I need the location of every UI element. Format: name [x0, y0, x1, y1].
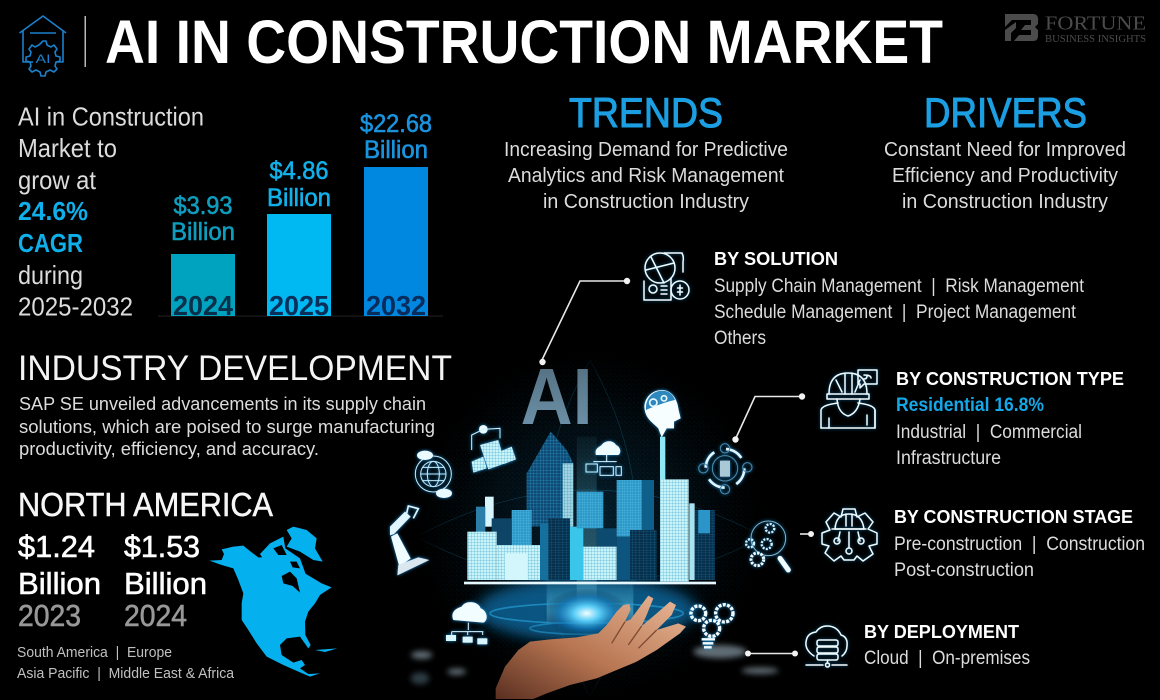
bar 2025 — [267, 157, 331, 321]
icon: cloud network — [446, 602, 487, 644]
bar 2032: Billion — [364, 136, 428, 164]
city platform — [464, 582, 716, 584]
bar 2025: Billion — [267, 184, 331, 212]
header divider — [85, 16, 86, 67]
growth statement: Market to — [18, 133, 117, 163]
title: AI IN CONSTRUCTION MARKET — [105, 8, 943, 76]
2023 value — [18, 529, 101, 633]
other regions: Asia Pacific | Middle East & Africa — [17, 666, 235, 682]
light beam and rings — [490, 583, 683, 638]
2024 value: Billion — [124, 566, 207, 601]
map: north america — [209, 527, 337, 677]
hero illustration: city on a hand — [390, 350, 788, 700]
growth statement: AI in Construction — [18, 102, 204, 132]
other regions — [17, 645, 235, 682]
growth statement: 24.6% — [18, 196, 88, 226]
bar 2032: 2032 — [366, 290, 426, 321]
bar 2024: $3.93 — [174, 192, 232, 220]
growth statement: grow at — [18, 165, 97, 195]
drivers block: DRIVERS — [924, 89, 1087, 136]
city skyline — [467, 432, 715, 617]
by deployment: Cloud | On-premises — [864, 648, 1030, 669]
trends block — [504, 89, 788, 213]
bar 2024: Billion — [171, 218, 235, 246]
connector: solution — [539, 278, 630, 365]
growth statement: 2025-2032 — [18, 292, 133, 322]
bar 2025: $4.86 — [270, 157, 328, 185]
by construction type: Industrial | Commercial — [896, 422, 1082, 443]
logo: Fortune Business Insights: BUSINESS INSIGHTS — [1045, 34, 1146, 45]
by construction type: BY CONSTRUCTION TYPE — [896, 368, 1124, 389]
bar 2032 — [360, 110, 432, 321]
icon: cloud deployment — [806, 626, 847, 667]
icon: circular device — [699, 444, 752, 494]
growth statement: during — [18, 260, 83, 290]
industry development block: productivity, efficiency, and accuracy. — [19, 439, 319, 459]
industry development block: INDUSTRY DEVELOPMENT — [18, 349, 452, 388]
2024 value: $1.53 — [124, 529, 200, 564]
2024 value — [124, 529, 207, 633]
trends block: in Construction Industry — [543, 191, 749, 213]
icon: cloud and monitors — [586, 441, 621, 475]
drivers block: Efficiency and Productivity — [892, 165, 1118, 187]
header icon: house with AI gear — [20, 16, 66, 76]
industry development block: SAP SE unveiled advancements in its supply chain — [19, 394, 426, 414]
icon: globe with clouds — [415, 451, 452, 498]
2024 value: 2024 — [124, 598, 187, 633]
bar chart: market size — [158, 110, 443, 321]
connector: construction type — [732, 393, 805, 443]
by construction stage: Post-construction — [894, 560, 1034, 581]
by solution: BY SOLUTION — [714, 248, 838, 269]
logo: Fortune Business Insights: FORTUNE — [1045, 12, 1146, 34]
drivers block: Constant Need for Improved — [884, 139, 1126, 161]
by construction type — [896, 368, 1124, 469]
bar 2024 — [171, 192, 235, 321]
by solution: Schedule Management | Project Management — [714, 302, 1077, 323]
north america block — [17, 486, 273, 682]
icon: gears magnifier — [746, 521, 788, 570]
by construction type: Infrastructure — [896, 448, 1001, 469]
by deployment: BY DEPLOYMENT — [864, 621, 1020, 642]
2023 value: 2023 — [18, 598, 81, 633]
growth statement — [18, 102, 204, 322]
icon: robot arm — [390, 506, 429, 575]
big AI letters: AI — [521, 352, 593, 441]
north america block: NORTH AMERICA — [18, 486, 273, 523]
glow under city — [477, 578, 697, 642]
trends block: TRENDS — [569, 89, 723, 136]
blurred skyline bottom — [411, 645, 778, 684]
icon: construction worker — [821, 370, 877, 428]
icon: head with gears — [644, 390, 681, 437]
drivers block: in Construction Industry — [902, 191, 1108, 213]
2023 value: Billion — [18, 566, 101, 601]
by solution: Others — [714, 328, 766, 349]
by construction stage: Pre-construction | Construction — [894, 534, 1145, 555]
drivers block — [884, 89, 1126, 213]
network sphere — [415, 350, 765, 700]
trends block: Analytics and Risk Management — [508, 165, 784, 187]
growth statement: CAGR — [18, 228, 83, 258]
industry development block — [18, 349, 452, 459]
connector: construction stage — [800, 531, 814, 537]
by solution — [714, 248, 1085, 349]
bar 2032: $22.68 — [360, 110, 432, 138]
by construction stage: BY CONSTRUCTION STAGE — [894, 506, 1133, 527]
bar 2025: 2025 — [269, 290, 329, 321]
icon: construction stage gear — [822, 509, 877, 561]
icon: buildings network — [472, 425, 516, 473]
2023 value: $1.24 — [18, 529, 95, 564]
connector: deployment — [745, 650, 798, 656]
logo: Fortune Business Insights — [1005, 12, 1146, 45]
by solution: Supply Chain Management | Risk Management — [714, 276, 1085, 297]
by construction stage — [894, 506, 1145, 581]
header icon: house with AI gear: AI — [36, 52, 50, 66]
hand — [496, 596, 686, 699]
industry development block: solutions, which are poised to surge manufacturing — [19, 417, 435, 437]
other regions: South America | Europe — [17, 645, 172, 661]
by construction type: Residential 16.8% — [896, 395, 1044, 416]
icon: solution — [644, 253, 689, 300]
icon: gears lightbulb — [691, 605, 733, 647]
by deployment — [864, 621, 1030, 669]
trends block: Increasing Demand for Predictive — [504, 139, 788, 161]
bar 2024: 2024 — [173, 290, 233, 321]
